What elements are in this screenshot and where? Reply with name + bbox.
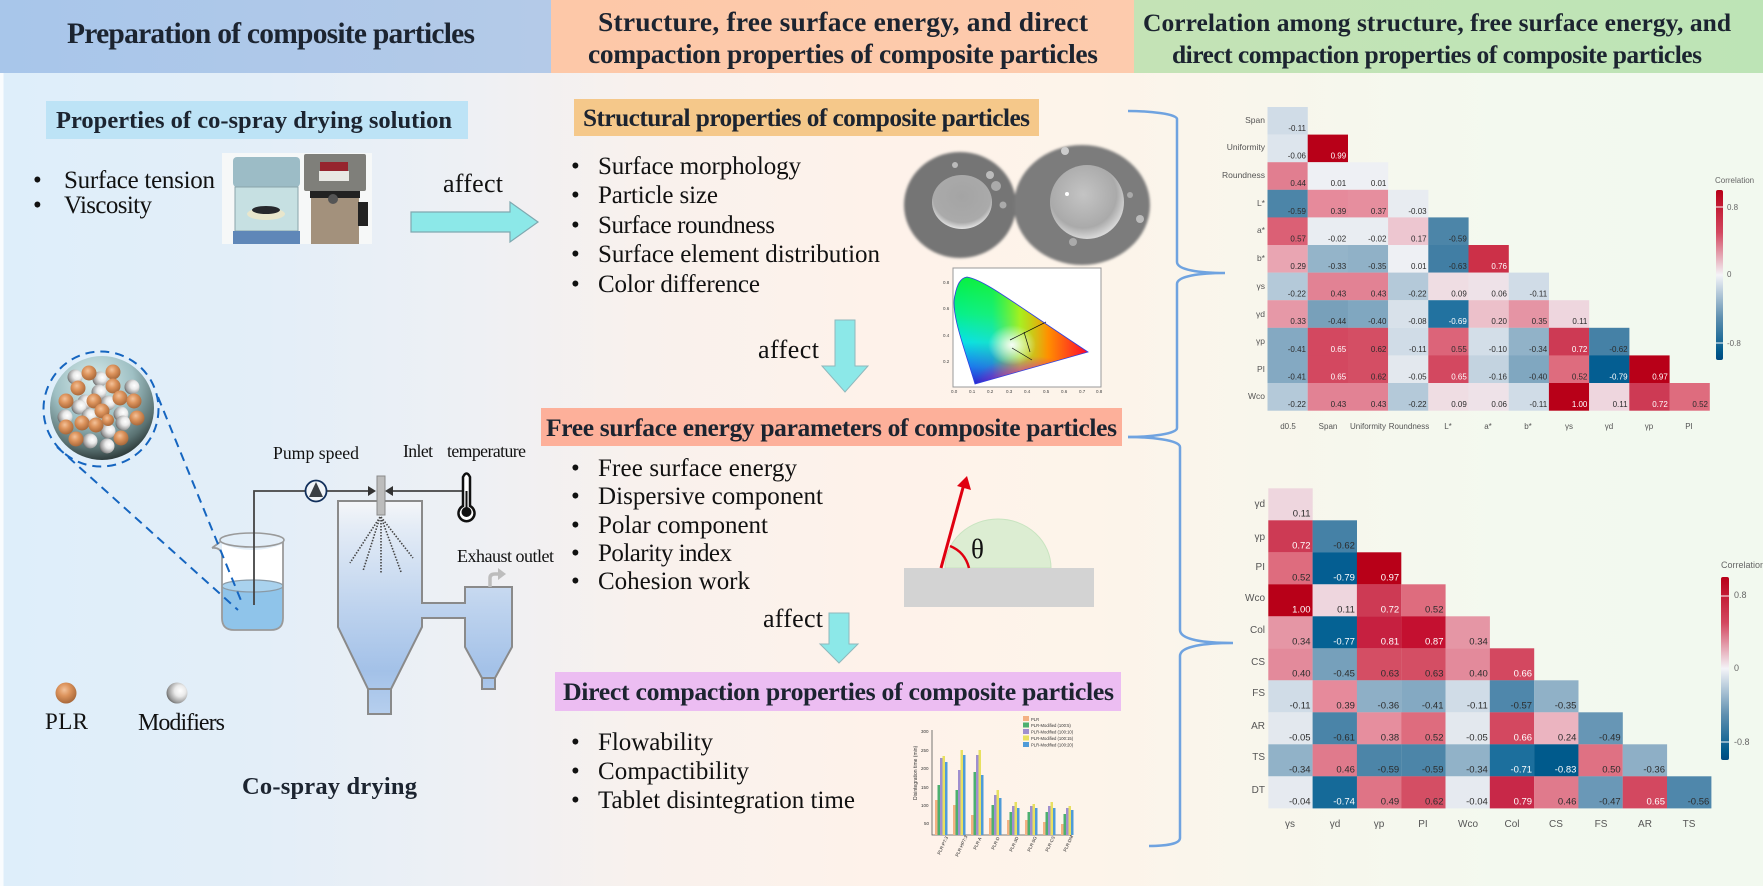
bullet list: surface energy parameters: Cohesion work: [598, 568, 750, 595]
bullet list: surface energy parameters: •: [571, 512, 580, 539]
bar chart: disintegration time: PLR-Modified (100:10): [1031, 730, 1074, 734]
nozzle: [377, 476, 385, 515]
cells: 0.76: [1491, 262, 1508, 271]
x axis labels: AR: [1638, 819, 1652, 830]
x axis labels: γd: [1330, 819, 1340, 830]
legend: modifiers: [138, 682, 225, 736]
bar chart: disintegration time: PLR-Modified (100:15): [1031, 736, 1074, 741]
cells: -0.57: [1510, 700, 1532, 711]
exhaust arrow: [490, 574, 499, 587]
cells: 0.49: [1381, 796, 1399, 807]
cells: [1268, 488, 1711, 808]
cells: 0.50: [1602, 764, 1621, 775]
cells: -0.11: [1467, 700, 1488, 711]
bullet list: surface energy parameters: •: [571, 568, 580, 595]
cells: -0.59: [1378, 764, 1399, 775]
icon: contact angle droplet: θ: [971, 534, 984, 564]
bar chart: disintegration time: PLR-P7:3: [936, 835, 949, 855]
cells: 0.09: [1451, 290, 1467, 299]
icon: contact angle droplet: [904, 476, 1094, 607]
cells: -0.41: [1422, 700, 1444, 711]
cells: -0.11: [1288, 124, 1307, 133]
x axis labels: TS: [1683, 819, 1696, 830]
chart: CIE chromaticity diagram: 0.7: [1079, 389, 1086, 394]
label: affect (surface energy to compaction): affect: [763, 604, 824, 633]
cells: 0.43: [1331, 400, 1347, 409]
bullet list: structural properties: •: [571, 271, 580, 298]
y axis labels: AR: [1251, 721, 1265, 732]
cells: -0.05: [1289, 732, 1311, 743]
legend: PLR: PLR: [45, 709, 89, 734]
y axis labels: L*: [1257, 198, 1266, 208]
label: pump speed: Pump speed: [273, 443, 359, 463]
y axis labels: DT: [1252, 785, 1265, 796]
correlation legend: [1721, 560, 1763, 760]
cells: -0.83: [1555, 764, 1576, 775]
cells: 0.01: [1371, 179, 1387, 188]
bracket: lower: [1128, 437, 1233, 846]
x axis labels: PI: [1418, 819, 1428, 830]
cells: -0.05: [1408, 372, 1427, 381]
bar chart: disintegration time: PLR-HP7:3: [954, 834, 969, 857]
label: affect (solution to structure): affect: [443, 169, 504, 198]
cells: 0.87: [1425, 636, 1444, 647]
cells: 0.29: [1290, 262, 1307, 271]
cells: -0.56: [1688, 796, 1709, 807]
chart: CIE chromaticity diagram: 0.5: [1043, 389, 1050, 394]
cells: -0.02: [1328, 234, 1347, 243]
bullet list: solution properties: Viscosity: [64, 192, 152, 219]
bullet list: surface energy parameters: Polarity index: [598, 540, 732, 567]
chart: CIE chromaticity diagram: 0.6: [1061, 389, 1068, 394]
cells: 0.62: [1371, 345, 1387, 354]
cells: 0.52: [1572, 372, 1588, 381]
x axis labels: PI: [1685, 422, 1693, 431]
cells: -0.10: [1489, 345, 1508, 354]
subheading: free surface energy parameters: Free surface energy parameters of composite particles: [546, 413, 1117, 442]
cells: -0.06: [1288, 152, 1307, 161]
cells: 0.46: [1558, 796, 1576, 807]
y axis labels: Span: [1245, 115, 1265, 125]
bullet list: structural properties: •: [571, 212, 580, 239]
cells: 0.72: [1572, 345, 1588, 354]
y axis labels: γd: [1256, 309, 1265, 319]
x axis labels: Roundness: [1389, 422, 1429, 431]
cells: 0.33: [1290, 317, 1307, 326]
cells: -0.74: [1333, 796, 1355, 807]
correlation legend: 0.8: [1734, 590, 1747, 600]
bullet list: solution properties: •: [33, 192, 42, 219]
bullet list: structural properties: •: [571, 182, 580, 209]
x axis labels: L*: [1444, 422, 1452, 431]
x axis labels: γs: [1565, 422, 1573, 431]
cells: 0.20: [1491, 317, 1508, 326]
bullet list: solution properties: •: [33, 167, 42, 194]
cells: 0.62: [1425, 796, 1444, 807]
y axis labels: γp: [1256, 336, 1265, 346]
bullet list: surface energy parameters: •: [571, 540, 580, 567]
bar chart: disintegration time: PLR-5G: [1026, 835, 1038, 852]
cells: -0.62: [1333, 540, 1355, 551]
cells: -0.44: [1328, 317, 1347, 326]
bullet list: compaction properties: Tablet disintegration time: [598, 787, 855, 814]
cells: 0.37: [1371, 207, 1387, 216]
y axis labels: PI: [1257, 364, 1265, 374]
cells: -0.11: [1530, 290, 1548, 299]
bar chart: disintegration time: 300: [921, 729, 929, 734]
cells: 0.43: [1371, 400, 1387, 409]
bullet list: structural properties: Color difference: [598, 271, 760, 298]
y axis labels: Uniformity: [1227, 142, 1266, 152]
cells: -0.35: [1555, 700, 1576, 711]
cells: 0.34: [1292, 636, 1311, 647]
bullet list: surface energy parameters: •: [571, 455, 580, 482]
legend: PLR: [45, 682, 89, 734]
bar chart: disintegration time: PLR-Modified (100:20): [1031, 742, 1074, 748]
y axis labels: [1222, 115, 1266, 401]
cells: -0.03: [1408, 207, 1427, 216]
y axis labels: CS: [1251, 657, 1265, 668]
chart: CIE chromaticity diagram: 0.1: [969, 389, 976, 394]
cells: 0.35: [1532, 317, 1548, 326]
cells: -0.34: [1529, 345, 1548, 354]
header: correlation among structure and properties: direct compaction properties of composite particles: [1172, 40, 1702, 69]
cells: -0.35: [1368, 262, 1387, 271]
chart: CIE chromaticity diagram: 0.2: [943, 359, 950, 364]
cells: 0.65: [1647, 796, 1665, 807]
bar chart: disintegration time: PLR-3D: [1008, 835, 1020, 852]
bar chart: disintegration time: PLR-Modified (100:5): [1031, 723, 1071, 728]
cells: 0.06: [1491, 400, 1508, 409]
bullet list: compaction properties: Flowability: [598, 729, 714, 756]
cells: 0.72: [1292, 540, 1311, 551]
cells: 0.62: [1371, 372, 1387, 381]
bullet list: compaction properties: [571, 729, 855, 814]
cells: -0.36: [1378, 700, 1399, 711]
x axis labels: Wco: [1458, 819, 1478, 830]
cells: 0.63: [1425, 668, 1444, 679]
x axis labels: γp: [1374, 819, 1385, 830]
cells: -0.11: [1290, 700, 1311, 711]
subheading: direct compaction properties: Direct compaction properties of composite particles: [563, 677, 1114, 706]
label: exhaust outlet: Exhaust outlet: [457, 546, 554, 566]
cells: -0.61: [1333, 732, 1355, 743]
bullet list: structural properties: •: [571, 241, 580, 268]
y axis labels: [1245, 499, 1265, 796]
y axis labels: γs: [1256, 281, 1265, 291]
cells: 0.79: [1514, 796, 1532, 807]
cells: -0.63: [1449, 262, 1467, 271]
caption: co-spray drying: Co-spray drying: [242, 773, 418, 800]
cells: 0.65: [1451, 372, 1467, 381]
cells: 0.72: [1381, 604, 1399, 615]
cells: -0.02: [1368, 234, 1387, 243]
cells: 0.55: [1451, 345, 1467, 354]
cells: 0.43: [1331, 290, 1347, 299]
cells: 1.00: [1292, 604, 1311, 615]
bullet list: surface energy parameters: •: [571, 483, 580, 510]
cells: 0.40: [1292, 668, 1311, 679]
x axis labels: CS: [1549, 819, 1563, 830]
cells: 0.24: [1558, 732, 1576, 743]
y axis labels: Roundness: [1222, 170, 1265, 180]
cells: -0.04: [1289, 796, 1311, 807]
subheading: structural properties: Structural properties of composite particles: [583, 104, 1030, 132]
label: inlet temperature: temperature: [447, 441, 526, 461]
cells: [1268, 107, 1710, 411]
bullet list: structural properties: Particle size: [598, 182, 718, 209]
subheading: properties of co-spray drying solution: [46, 101, 468, 139]
bar chart: disintegration time: PLR: [1031, 717, 1039, 722]
y axis labels: Col: [1250, 625, 1265, 636]
chart: CIE chromaticity diagram: 0.4: [1024, 389, 1031, 394]
bar chart: disintegration time: 150: [921, 785, 929, 790]
chart: CIE chromaticity diagram: 0.8: [1096, 389, 1103, 394]
bar chart: disintegration time: 200: [921, 766, 929, 771]
cells: -0.16: [1489, 372, 1508, 381]
photo: tensiometer and viscometer instruments: [222, 153, 372, 244]
y axis labels: a*: [1257, 225, 1266, 235]
cells: -0.62: [1609, 345, 1628, 354]
correlation legend: 0: [1734, 663, 1739, 673]
y axis labels: FS: [1252, 688, 1265, 699]
cells: -0.79: [1333, 572, 1355, 583]
cells: 0.11: [1572, 317, 1588, 326]
y axis labels: PI: [1256, 562, 1265, 573]
bar chart: disintegration time: [913, 716, 1074, 857]
header: preparation of composite particles: [0, 0, 551, 73]
bullet list: structural properties: [571, 153, 880, 298]
chart: CIE chromaticity diagram: 0.3: [1006, 389, 1013, 394]
bar chart: disintegration time: PLR-D: [990, 835, 1001, 850]
x axis labels: γs: [1285, 819, 1295, 830]
bullet list: structural properties: Surface morphology: [598, 153, 802, 180]
legend: modifiers: Modifiers: [138, 710, 225, 736]
x axis labels: [1280, 422, 1693, 431]
correlation legend: 0.8: [1727, 203, 1739, 212]
cells: -0.22: [1288, 290, 1307, 299]
bar chart: disintegration time: PLR-CS: [1044, 835, 1056, 852]
cells: 0.52: [1425, 732, 1444, 743]
cells: 0.34: [1469, 636, 1488, 647]
bullet list: structural properties: •: [571, 153, 580, 180]
cells: 0.11: [1293, 508, 1311, 519]
cells: -0.71: [1510, 764, 1532, 775]
bar chart: disintegration time: Disintegration time (min): [913, 745, 919, 800]
x axis labels: Col: [1504, 819, 1520, 830]
cells: -0.22: [1288, 400, 1307, 409]
pump: [306, 480, 326, 502]
bullet list: compaction properties: •: [571, 787, 580, 814]
cells: 0.97: [1381, 572, 1399, 583]
cells: -0.41: [1288, 372, 1307, 381]
cells: -0.77: [1333, 636, 1355, 647]
dashed zoom lines: [57, 397, 242, 610]
cells: -0.11: [1409, 345, 1427, 354]
cells: -0.59: [1449, 234, 1467, 243]
heatmap: structure vs surface energy correlation: [1222, 107, 1754, 431]
bullet list: surface energy parameters: Polar component: [598, 512, 768, 539]
cells: 0.57: [1290, 234, 1307, 243]
cells: -0.22: [1408, 400, 1427, 409]
cells: -0.45: [1333, 668, 1355, 679]
bullet list: structural properties: Surface roundness: [598, 212, 775, 239]
cells: 0.52: [1425, 604, 1444, 615]
bullet list: compaction properties: •: [571, 758, 580, 785]
bullet list: solution properties: [33, 167, 216, 219]
cells: 0.97: [1652, 372, 1668, 381]
correlation legend: [1715, 176, 1754, 360]
thermometer: [459, 474, 474, 521]
label: inlet temperature: [403, 441, 526, 461]
cells: -0.05: [1466, 732, 1488, 743]
chart: CIE chromaticity diagram: 0.2: [987, 389, 994, 394]
cells: -0.08: [1408, 317, 1427, 326]
cells: 0.72: [1652, 400, 1668, 409]
cells: -0.59: [1288, 207, 1307, 216]
cells: 0.99: [1331, 152, 1347, 161]
cells: 0.11: [1613, 400, 1628, 409]
cells: -0.47: [1599, 796, 1621, 807]
image: SEM micrographs of particles: [904, 145, 1150, 265]
tower: [338, 501, 512, 714]
cells: -0.69: [1449, 317, 1467, 326]
arrow: surface energy affects compaction: [820, 613, 858, 663]
y axis labels: γp: [1254, 532, 1265, 543]
cells: 0.66: [1514, 668, 1532, 679]
chart: CIE chromaticity diagram: [943, 268, 1102, 393]
beaker: [212, 533, 284, 630]
heatmap: surface energy vs compaction correlation: [1245, 488, 1763, 830]
cells: 0.01: [1331, 179, 1347, 188]
cells: 0.09: [1451, 400, 1467, 409]
x axis labels: γd: [1605, 422, 1613, 431]
arrow: solution affects structure: [411, 202, 538, 242]
bullet list: surface energy parameters: Dispersive component: [598, 483, 823, 510]
cells: 0.44: [1290, 179, 1307, 188]
bar chart: disintegration time: 250: [921, 748, 929, 753]
correlation legend: -0.8: [1734, 737, 1750, 747]
chart: CIE chromaticity diagram: 0.8: [943, 280, 950, 285]
cells: 0.39: [1331, 207, 1347, 216]
chart: CIE chromaticity diagram: 0.4: [943, 333, 950, 338]
cells: -0.40: [1368, 317, 1387, 326]
bar chart: disintegration time: PLR-DM: [1062, 834, 1074, 852]
cells: -0.49: [1599, 732, 1621, 743]
x axis labels: b*: [1524, 422, 1532, 431]
label: affect (structure to surface energy): affect: [758, 335, 820, 364]
cells: 0.40: [1469, 668, 1488, 679]
cells: -0.79: [1609, 372, 1628, 381]
correlation legend: 0: [1727, 270, 1732, 279]
cells: 0.17: [1411, 234, 1427, 243]
bar chart: disintegration time: 100: [921, 803, 929, 808]
cells: -0.04: [1466, 796, 1488, 807]
cells: -0.34: [1466, 764, 1488, 775]
cells: 0.01: [1411, 262, 1427, 271]
header: structure, free surface energy, and direct compaction: [551, 0, 1134, 73]
bar chart: disintegration time: 50: [924, 821, 930, 826]
bullet list: structural properties: Surface element distribution: [598, 241, 880, 268]
bullet list: surface energy parameters: Free surface energy: [598, 455, 798, 482]
cells: 0.38: [1381, 732, 1399, 743]
bullet list: compaction properties: Compactibility: [598, 758, 750, 785]
subheading: properties of co-spray drying solution: Properties of co-spray drying solution: [56, 107, 452, 134]
bullet list: compaction properties: •: [571, 729, 580, 756]
label: inlet temperature: Inlet: [403, 441, 433, 461]
header: correlation among structure and properties: [1134, 0, 1763, 73]
y axis labels: TS: [1252, 752, 1265, 763]
cells: 0.63: [1381, 668, 1399, 679]
cells: -0.36: [1643, 764, 1665, 775]
cells: 0.46: [1336, 764, 1355, 775]
header: correlation among structure and properties: Correlation among structure, free surface energy, and: [1143, 8, 1731, 37]
x axis labels: γp: [1645, 422, 1654, 431]
feed tube and arrows: [254, 491, 463, 605]
x axis labels: Uniformity: [1350, 422, 1386, 431]
arrow: structure affects surface energy: [822, 320, 868, 392]
x axis labels: a*: [1484, 422, 1492, 431]
header: structure, free surface energy, and direct compaction: compaction properties of composite particles: [588, 38, 1098, 69]
y axis labels: b*: [1257, 253, 1266, 263]
spray: [350, 517, 413, 573]
x axis labels: Span: [1319, 422, 1337, 431]
correlation legend: -0.8: [1727, 339, 1741, 348]
bullet list: solution properties: Surface tension: [64, 167, 216, 194]
y axis labels: Wco: [1248, 391, 1265, 401]
cells: -0.22: [1408, 290, 1427, 299]
cells: 0.43: [1371, 290, 1387, 299]
cells: 0.65: [1331, 372, 1347, 381]
cells: 0.06: [1491, 290, 1508, 299]
cells: -0.59: [1422, 764, 1444, 775]
bullet list: surface energy parameters: [571, 455, 823, 595]
chart: CIE chromaticity diagram: 0.6: [943, 306, 950, 311]
cells: 0.52: [1692, 400, 1709, 409]
cells: 0.66: [1514, 732, 1532, 743]
cells: 0.39: [1336, 700, 1355, 711]
chart: CIE chromaticity diagram: 0.0: [951, 389, 958, 394]
y axis labels: γd: [1254, 499, 1265, 510]
cells: -0.11: [1530, 400, 1548, 409]
spray drying schematic: [57, 397, 512, 714]
cells: 0.52: [1292, 572, 1311, 583]
cells: -0.41: [1288, 345, 1307, 354]
cells: 0.11: [1337, 604, 1355, 615]
bracket: upper: [1128, 111, 1225, 437]
cells: -0.33: [1328, 262, 1347, 271]
cells: -0.34: [1289, 764, 1311, 775]
header: structure, free surface energy, and direct compaction: Structure, free surface energy, and direct: [598, 6, 1089, 37]
cells: 0.81: [1381, 636, 1399, 647]
x axis labels: d0.5: [1280, 422, 1296, 431]
cells: 0.65: [1331, 345, 1347, 354]
cells: 1.00: [1572, 400, 1588, 409]
x axis labels: [1285, 819, 1696, 830]
y axis labels: Wco: [1245, 593, 1265, 604]
correlation legend: Correlation: [1715, 176, 1754, 185]
header: preparation of composite particles: Preparation of composite particles: [67, 18, 475, 50]
bar chart: disintegration time: PLR-A: [972, 836, 983, 850]
icon: composite particle magnified: [44, 352, 158, 466]
cells: -0.40: [1529, 372, 1548, 381]
x axis labels: FS: [1595, 819, 1608, 830]
